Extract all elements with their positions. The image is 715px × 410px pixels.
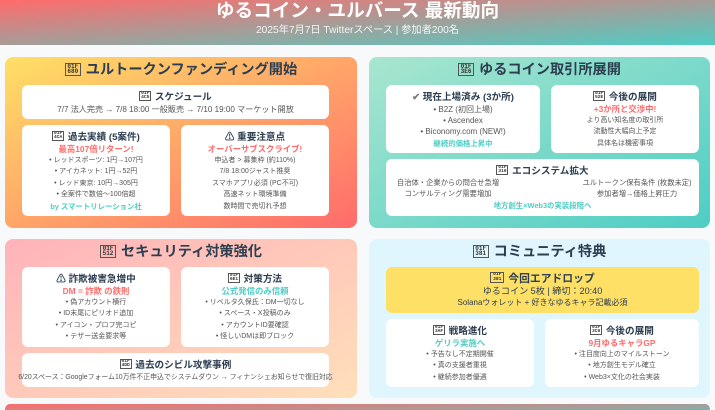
card: future exchanges: 01F (595, 91, 603, 96)
heading: security: 01F (103, 245, 113, 252)
card: listed exchanges (386, 85, 540, 153)
card: airdrop: ゆるコイン 5枚 | 締切：20:40 (483, 286, 602, 296)
card: past results: • 全案件で数倍〜100倍超 (56, 191, 136, 198)
card: fraud: • ID末尾にピリオド追加 (59, 310, 133, 317)
card: important notes: 申込者 > 募集枠 (約110%) (215, 157, 295, 164)
card: airdrop: 381 (493, 277, 501, 282)
panel: security (5, 239, 357, 398)
card: fraud: • アイコン・プロフ完コピ (55, 322, 137, 329)
heading: exchange: 3E6 (461, 68, 471, 75)
card: future exchanges: +3か所と交渉中! (594, 104, 656, 114)
card: strategy: 3AF (435, 329, 443, 334)
panel: ultra token funding (5, 57, 357, 228)
card: airdrop: 01F (493, 272, 501, 277)
heading: funding: 01F (67, 63, 78, 70)
heading: exchange: ゆるコイン取引所展開 (479, 62, 621, 78)
card: ecosystem: 310 (498, 169, 507, 174)
card: future exchanges: 具体名は機密事項 (597, 140, 653, 147)
card: countermeasures (181, 267, 329, 347)
card: future: 01F (592, 325, 600, 330)
ecosystem note: 地方創生×Web3の実装段階へ (494, 201, 591, 210)
ecosystem right column: 参加者増→価格上昇圧力 (597, 189, 677, 198)
card: listed exchanges: • Biconomy.com (NEW!) (420, 127, 506, 136)
card: strategy: • 予告なし不定期開催 (426, 351, 494, 358)
card: strategy: • 真の支援者重視 (433, 362, 487, 369)
card: sybil attack: 6/20スペース：Googleフォーム10万件不正申込でシステムダウン → フィナンシェお知らせで復旧対応 (18, 374, 333, 380)
card: listed exchanges: • B2Z (初回上場) (433, 104, 493, 114)
card: important notes: 高速ネット環境準備 (224, 191, 286, 198)
card: countermeasures: 6E1 (230, 277, 238, 282)
ecosystem left column (397, 178, 499, 198)
card: future: 3C6 (592, 329, 600, 334)
card: past results (22, 125, 170, 216)
card: ecosystem: 01F (498, 165, 507, 170)
header banner (0, 0, 715, 45)
card: airdrop (386, 267, 699, 313)
card: fraud (22, 267, 170, 347)
card: future (545, 319, 699, 387)
card: past results: • レッド東京: 10円→305円 (54, 180, 138, 187)
card: strategy: 戦略進化 (449, 326, 487, 336)
card: schedule: スケジュール (155, 92, 212, 102)
card: sybil attack: 4DD (122, 363, 130, 368)
ecosystem left column: コンサルティング需要増加 (404, 189, 492, 198)
card: airdrop: 今回エアドロップ (508, 272, 595, 284)
ecosystem left column: 自治体・企業からの問合せ急増 (397, 178, 499, 187)
card: important notes: 7/8 18:00ジャスト推奨 (220, 168, 290, 175)
card: future exchanges: 今後の展開 (609, 92, 657, 102)
card: schedule: 01F (141, 91, 149, 96)
card: countermeasures: 01F (230, 273, 238, 278)
card: sybil attack (22, 353, 329, 387)
heading: funding: ユルトークンファンディング開始 (86, 62, 297, 78)
card: schedule (22, 85, 329, 119)
card: schedule: 4C5 (141, 95, 149, 100)
card: airdrop: Solanaウォレット + 好きなゆるキャラ記載必須 (457, 298, 628, 307)
card: sybil attack: 過去のシビル攻撃事例 (135, 360, 231, 370)
card: fraud: • 偽アカウント横行 (66, 299, 126, 306)
card: strategy: • 継続参加者優遇 (433, 374, 487, 381)
card: listed exchanges: ✔ 現在上場済み (3か所) (412, 92, 514, 102)
card: future exchanges: より高い知名度の取引所 (587, 117, 663, 124)
card: strategy (386, 319, 534, 387)
card: past results: 過去実績 (5案件) (68, 132, 140, 142)
card: countermeasures: • スペース・X投稿のみ (219, 310, 291, 317)
heading: security: 512 (103, 250, 113, 257)
card: ecosystem: エコシステム拡大 (512, 166, 589, 176)
heading: community: 01F (475, 245, 486, 252)
card: countermeasures: • 怪しいDMは即ブロック (216, 333, 294, 340)
card: future exchanges: 流動性大幅向上予定 (594, 128, 656, 135)
card: future exchanges (551, 85, 699, 153)
card: important notes: スマホアプリ必須 (PC不可) (212, 180, 298, 187)
heading: security: セキュリティ対策強化 (121, 244, 262, 260)
card: countermeasures: 公式発信のみ信頼 (222, 286, 288, 296)
card: schedule: 7/7 法人完売 → 7/8 18:00 一般販売 → 7/10 19:00 マーケット開放 (57, 104, 294, 114)
card: future: 今後の展開 (606, 326, 654, 336)
panel: exchange expansion (369, 57, 710, 228)
card: future: • 注目度向上のマイルストーン (574, 351, 670, 358)
heading: funding: 680 (67, 68, 78, 75)
card: sybil attack: 01F (122, 359, 130, 364)
card: important notes: ⚠ 重要注意点 (225, 132, 285, 142)
card: future exchanges: 52E (595, 95, 603, 100)
card: listed exchanges: • Ascendex (443, 116, 483, 125)
card: important notes: オーバーサブスクライブ! (208, 144, 302, 154)
card: past results: by スマートリレーション社 (50, 202, 142, 211)
card: important notes: 数時間で売切れ予想 (224, 203, 286, 210)
card: strategy: 01F (435, 325, 443, 330)
subtitle: 2025年7月7日 Twitterスペース | 参加者200名 (256, 25, 459, 36)
card: fraud: DM = 詐欺 の鉄則 (63, 286, 129, 296)
card: future: • 地方創生モデル確立 (588, 362, 656, 369)
card: important notes (181, 125, 329, 216)
card: past results: 4CA (54, 135, 62, 140)
card: future: 9月ゆるキャラGP (588, 338, 656, 348)
card: past results: 01F (54, 131, 62, 136)
card: strategy: ゲリラ実施へ (435, 338, 485, 348)
card: fraud: ⚠ 詐欺被害急増中 (56, 274, 136, 284)
card: future: • Web3×文化の社会実装 (584, 374, 660, 381)
card: past results: 最高107倍リターン! (59, 144, 133, 154)
card: past results: • アイカネット: 1円→52円 (55, 168, 137, 175)
card: countermeasures: • リベルタ久保氏：DM一切なし (205, 299, 305, 306)
ecosystem right column (582, 178, 692, 198)
card: ecosystem (386, 159, 699, 216)
heading: exchange: 01F (461, 63, 471, 70)
ecosystem right column: ユルトークン保有条件 (枚数未定) (582, 178, 692, 187)
card: past results: • レッドスポーツ: 1円→107円 (49, 157, 143, 164)
card: countermeasures: 対策方法 (244, 274, 282, 284)
heading: community: コミュニティ特典 (494, 244, 606, 260)
card: fraud: • テザー送金要求等 (66, 333, 126, 340)
title: ゆるコイン・ユルバース 最新動向 (216, 0, 499, 21)
card: countermeasures: • アカウントID要確認 (221, 322, 289, 329)
footer bar (5, 404, 710, 410)
card: listed exchanges: 継続的価格上昇中 (433, 139, 493, 148)
panel: community (369, 239, 710, 398)
heading: community: 381 (475, 250, 486, 257)
